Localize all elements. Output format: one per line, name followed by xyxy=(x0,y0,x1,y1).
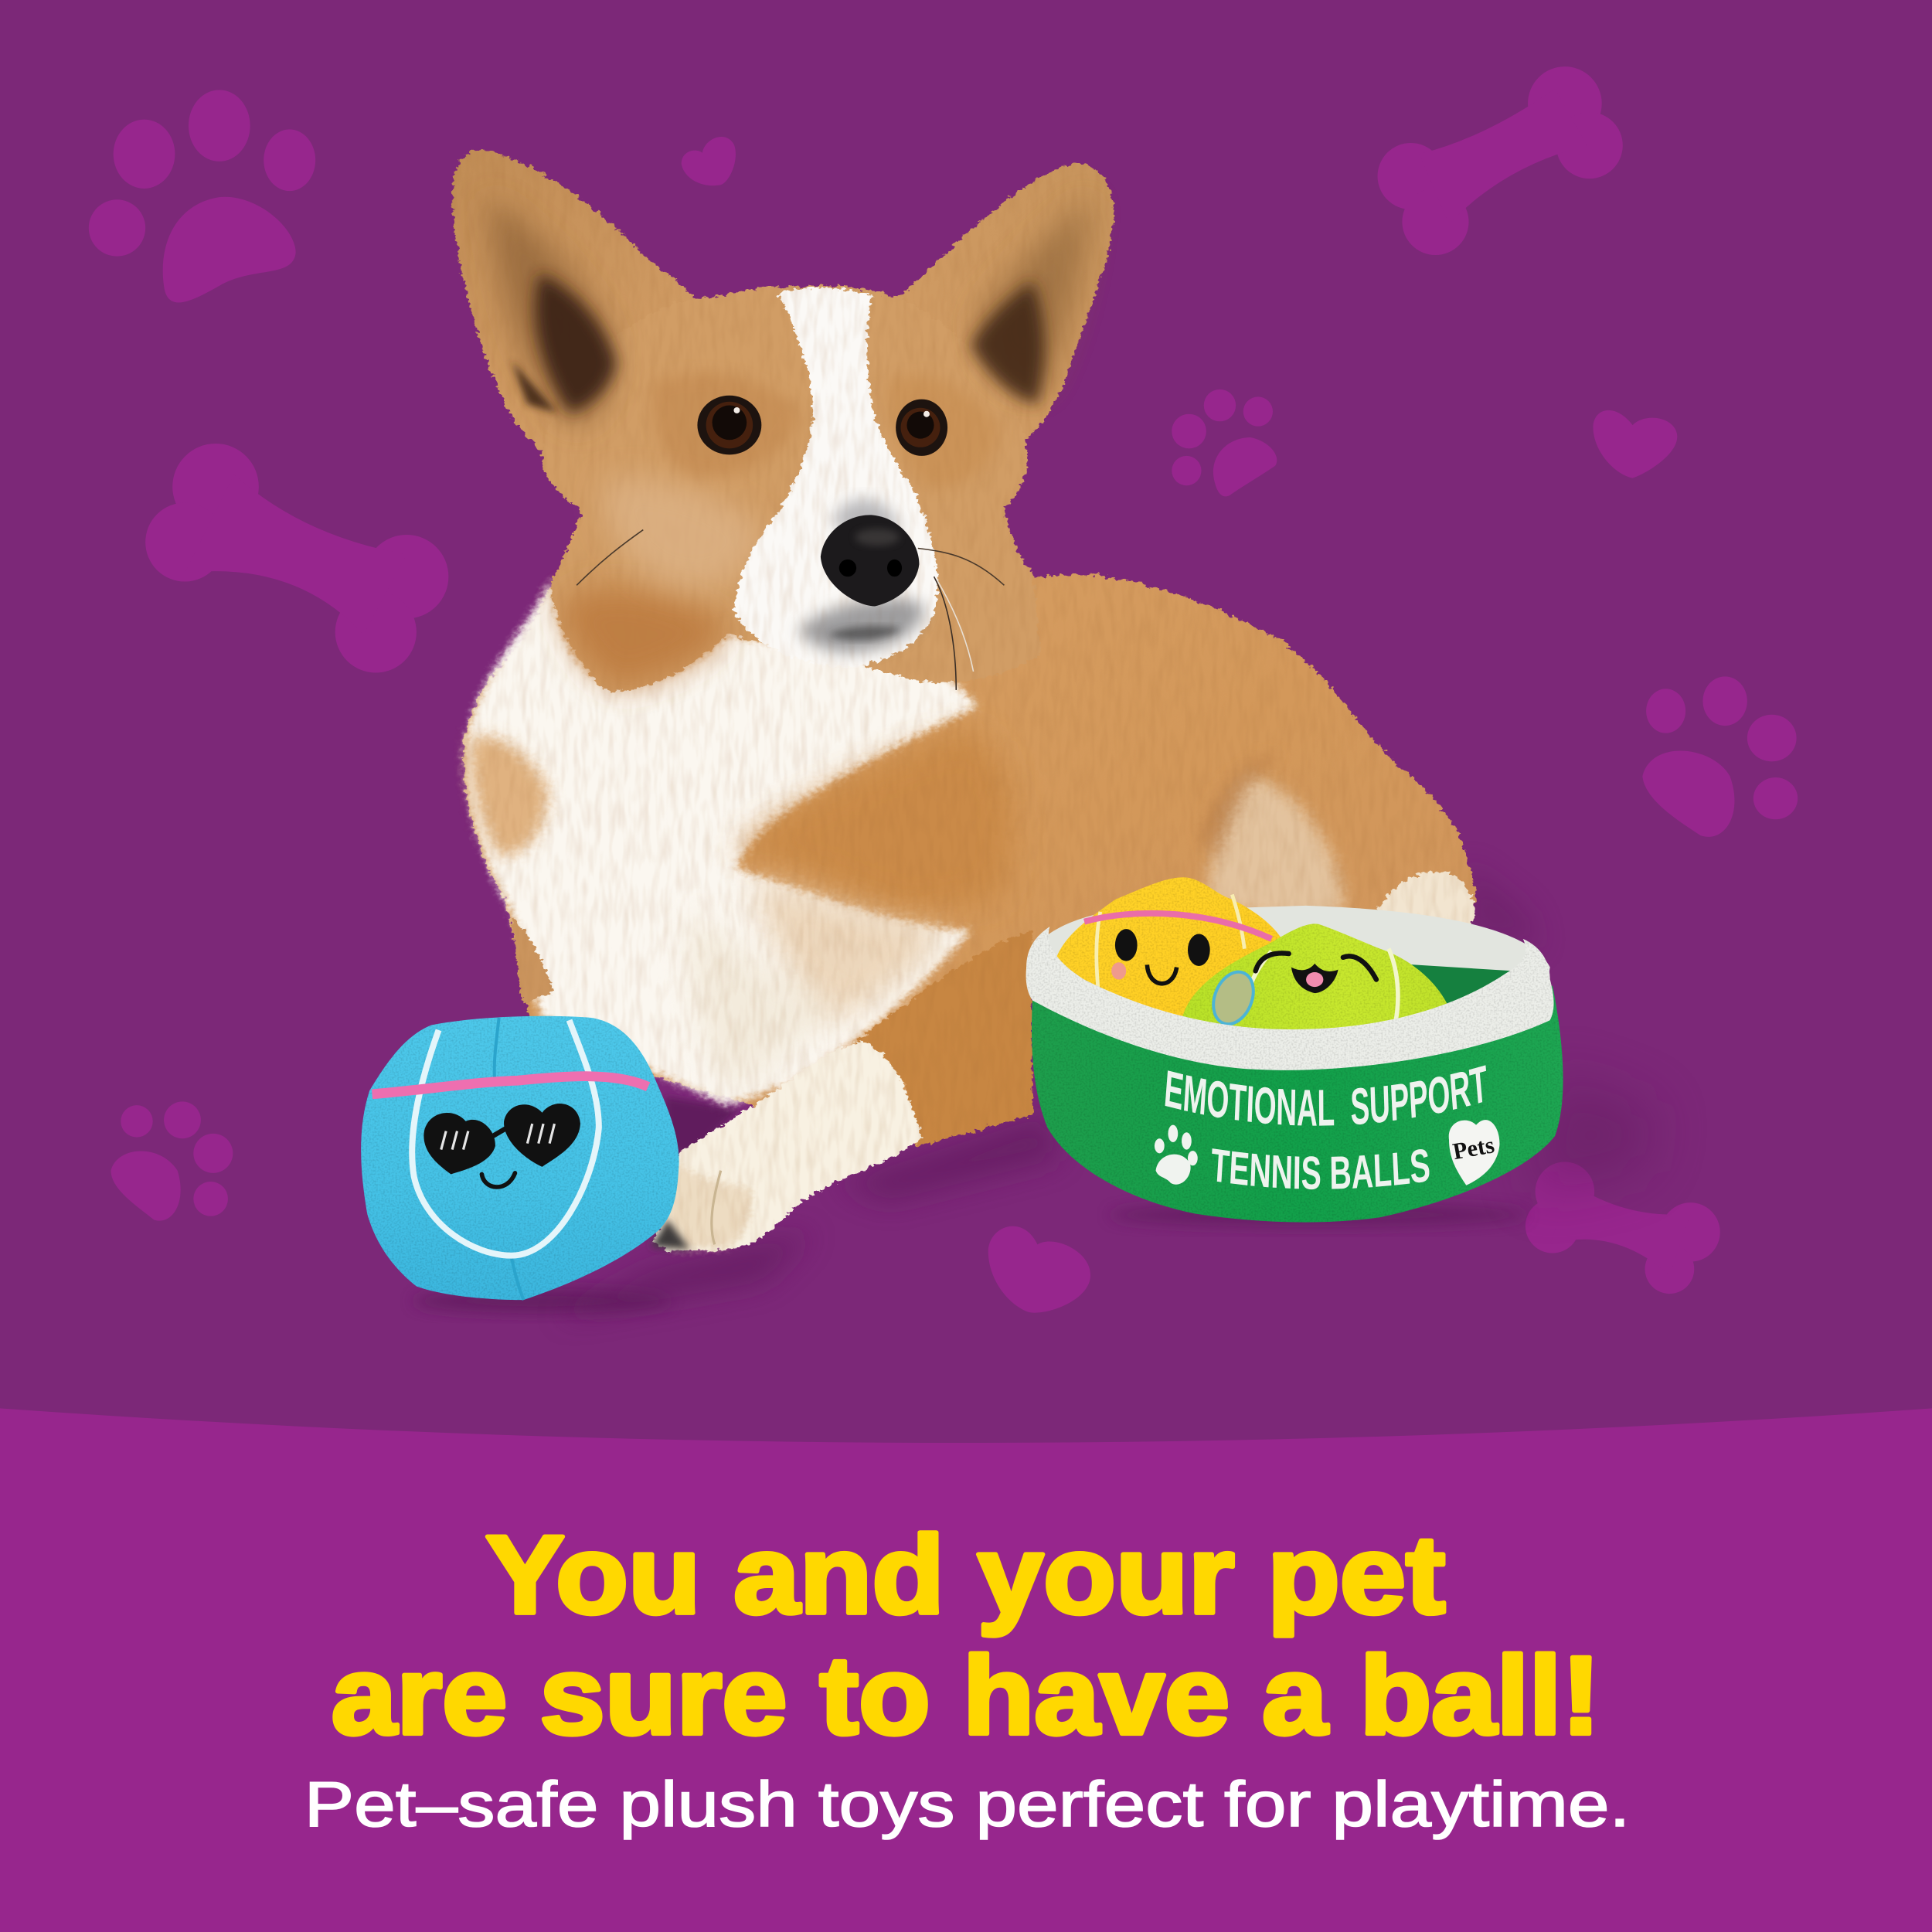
bowl back rim xyxy=(1026,906,1550,1022)
lime ball mouth xyxy=(1291,964,1338,993)
icon: paw centre xyxy=(1172,389,1277,496)
icon: bone top right xyxy=(1378,66,1623,255)
smile xyxy=(481,1173,515,1187)
sunglasses xyxy=(423,1104,580,1174)
yellow ball pink stripe xyxy=(1084,913,1271,939)
yellow ball cheek xyxy=(1111,962,1126,980)
icon: paw lower left xyxy=(111,1101,233,1221)
paw toe line xyxy=(712,1171,721,1244)
lime ball body xyxy=(1180,923,1454,1041)
left ear lower fold xyxy=(512,360,557,413)
ball body xyxy=(361,1016,679,1300)
bottom seam xyxy=(512,1257,524,1300)
left ear xyxy=(452,150,740,487)
icon: white heart badge xyxy=(1449,1120,1499,1185)
bowl body xyxy=(1032,986,1563,1223)
heading line 1: You and your pet xyxy=(485,1513,1445,1637)
icon: paw right xyxy=(1642,676,1798,837)
foreleg xyxy=(653,1041,922,1252)
yellow ball lines xyxy=(1097,895,1244,1001)
right eye xyxy=(896,400,947,456)
top seam xyxy=(495,1018,499,1084)
cheek shading xyxy=(560,588,727,688)
right cheek shade xyxy=(887,376,998,488)
dog body xyxy=(463,518,1475,1252)
chest tan patch left xyxy=(471,736,549,856)
ground shadows xyxy=(413,862,1657,1318)
paw toe dark tips xyxy=(651,1219,690,1250)
lower panel band xyxy=(0,1408,1932,1932)
lime ball lines xyxy=(1250,949,1398,1026)
muzzle grey xyxy=(798,599,924,653)
left ear dark hollow xyxy=(536,274,616,413)
elbow tan area xyxy=(856,930,1032,1146)
icon: heart bottom xyxy=(988,1226,1090,1313)
right ear inner shade xyxy=(979,197,1090,390)
toy: green bowl with tennis balls xyxy=(1026,877,1563,1223)
icon: bone left xyxy=(145,444,448,673)
lime ball eyes xyxy=(1256,953,1376,980)
chest tan patch lower left xyxy=(512,918,554,1004)
white blaze xyxy=(733,288,937,668)
hind paw xyxy=(1378,872,1475,927)
icon: paw top left xyxy=(89,90,315,303)
paw shading xyxy=(665,1158,752,1250)
face shade left eye xyxy=(651,373,801,478)
lime ball toy xyxy=(1180,923,1454,1041)
yellow ball eyes xyxy=(1115,929,1210,966)
grey above nose xyxy=(833,499,903,530)
shoulder pale fluff xyxy=(752,881,949,1022)
body silhouette xyxy=(463,518,1475,1146)
yellow ball toy xyxy=(1053,877,1284,1029)
racquet xyxy=(1206,966,1260,1030)
yellow ball body xyxy=(1053,877,1284,1029)
icon: small heart top xyxy=(682,137,736,185)
subheading: Pet–safe plush toys perfect for playtime. xyxy=(304,1768,1630,1840)
left eye xyxy=(697,396,761,454)
pink stripe xyxy=(372,1077,648,1094)
yellow ball smile xyxy=(1147,964,1177,984)
background pattern of paws, bones and hearts xyxy=(89,66,1798,1313)
icon: white paw on bowl xyxy=(1155,1125,1198,1185)
dog: corgi xyxy=(452,150,1475,1252)
icon: heart right xyxy=(1593,410,1677,478)
nose xyxy=(821,515,919,606)
chest cream shading xyxy=(689,912,838,1090)
white chest xyxy=(465,579,977,1105)
heading line 2: are sure to have a ball! xyxy=(332,1634,1600,1757)
head and ruff xyxy=(543,286,1041,691)
hind leg fold xyxy=(1202,752,1281,862)
left ear inner shade xyxy=(487,197,613,425)
toy: blue tennis ball with sunglasses xyxy=(361,1016,679,1300)
bowl front rim xyxy=(1026,927,1554,1070)
bowl label text line 1: EMOTIONAL SUPPORT xyxy=(1165,1065,1486,1126)
nostrils xyxy=(839,560,902,577)
badge text: Pets xyxy=(1451,1131,1496,1165)
bowl inner green xyxy=(1355,961,1513,1035)
mouth xyxy=(828,626,902,640)
hind leg xyxy=(1207,774,1345,922)
dog head xyxy=(452,150,1114,691)
right ear dark hollow xyxy=(971,281,1044,404)
face highlight left xyxy=(603,478,764,589)
heading xyxy=(332,1513,1600,1757)
icon: bone bottom right xyxy=(1526,1162,1720,1294)
nose highlight xyxy=(855,529,900,546)
lime ball tongue xyxy=(1306,972,1323,987)
bowl label text line 2: TENNIS BALLS xyxy=(1212,1148,1430,1190)
right ear xyxy=(898,164,1114,444)
shoulder tan tuft xyxy=(734,727,1014,913)
court line xyxy=(412,1020,599,1256)
whiskers xyxy=(577,530,1004,690)
